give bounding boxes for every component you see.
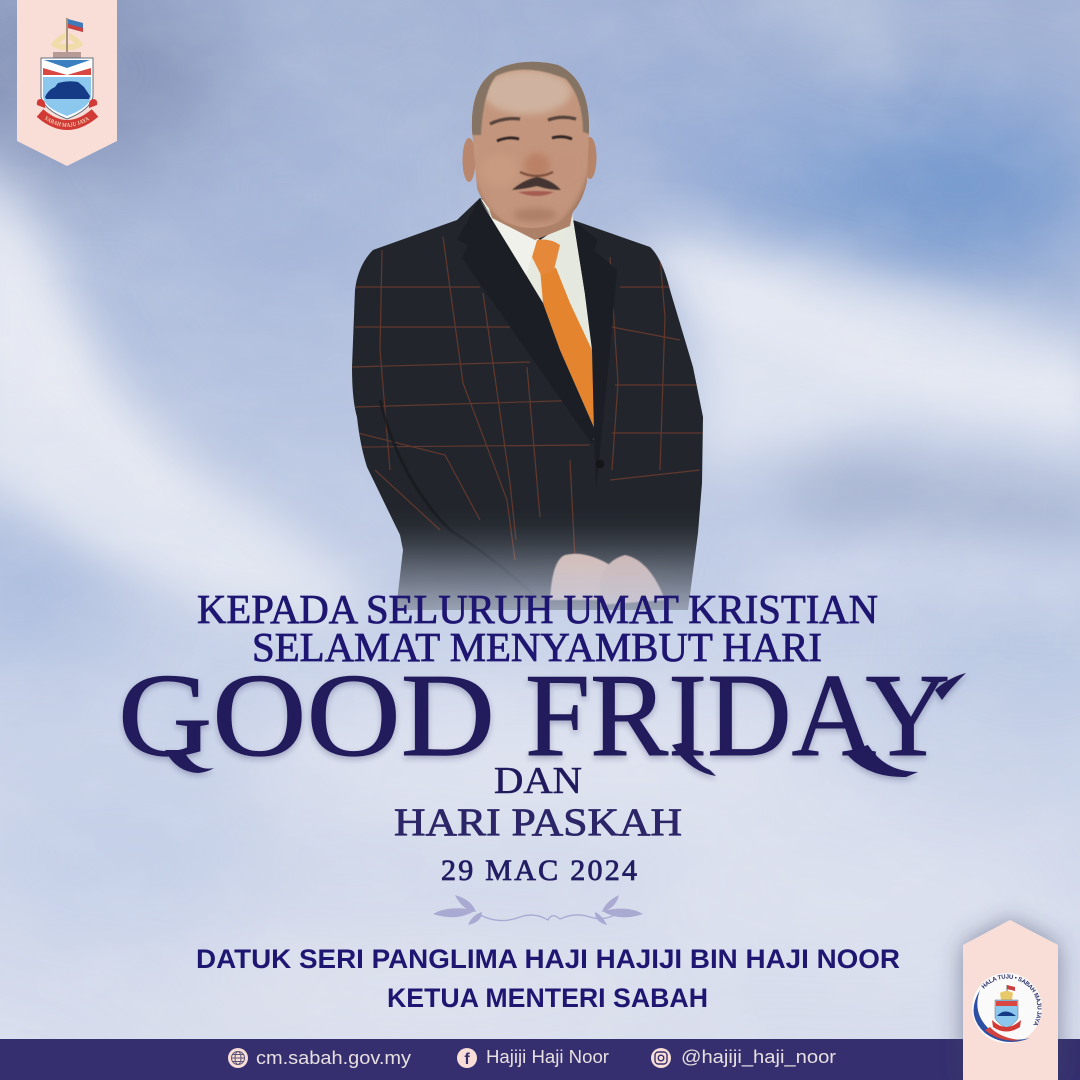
head (472, 62, 590, 228)
heading: greeting lines (197, 586, 878, 670)
small crest (1006, 985, 1008, 1000)
ears (462, 138, 476, 182)
brows, eyes, moustache and lips (490, 117, 576, 196)
icon: web (228, 1048, 248, 1068)
title swashes (165, 673, 966, 777)
portrait: man in checked suit, fading into the sky (352, 55, 703, 610)
text: date: 29 MAC 2024 (441, 854, 637, 887)
emblem banner, bottom right (946, 907, 1075, 1080)
right lapel (573, 220, 617, 490)
jacket button (596, 460, 604, 468)
signatory name and title: DATUK SERI PANGLIMA HAJI HAJIJI BIN HAJI NOOR (196, 944, 900, 974)
title: GOOD FRIDAY: FRIDAY (525, 649, 950, 781)
left lapel (457, 198, 596, 444)
crescent (974, 990, 1030, 1042)
tie (532, 240, 596, 432)
text: HARI PASKAH: HARI PASKAH (394, 801, 682, 844)
icon: instagram (651, 1048, 671, 1068)
hands (550, 554, 665, 605)
icon: facebook (457, 1048, 477, 1068)
text: instagram: @hajiji_haji_noor (681, 1047, 836, 1068)
ornament: leaves (433, 895, 643, 925)
text: website: cm.sabah.gov.my (256, 1048, 411, 1068)
signatory name and title (196, 944, 900, 1013)
shirt (480, 198, 594, 440)
footer bar (0, 1039, 1080, 1080)
round emblem (972, 973, 1042, 1043)
signatory name and title: KETUA MENTERI SABAH (387, 983, 708, 1013)
Sabah crest (36, 18, 98, 130)
collar (480, 200, 537, 275)
text: facebook: Hajiji Haji Noor (486, 1047, 609, 1067)
icon: facebook: f (464, 1051, 470, 1068)
title: GOOD FRIDAY (118, 649, 966, 781)
hair (472, 62, 589, 136)
text: DAN: DAN (494, 760, 582, 802)
neck (489, 208, 573, 240)
ribbon (37, 99, 97, 108)
jacket (352, 198, 703, 610)
Sabah crest: SABAH MAJU JAYA (44, 116, 90, 127)
coat-of-arms banner, top left (17, 0, 117, 166)
ring text: HALA TUJU • SABAH MAJU JAYA (981, 974, 1042, 1026)
heading: greeting lines: SELAMAT MENYAMBUT HARI (252, 624, 822, 670)
title: GOOD FRIDAY: GOOD (118, 649, 495, 781)
heading: greeting lines: KEPADA SELURUH UMAT KRISTIAN (197, 586, 878, 632)
